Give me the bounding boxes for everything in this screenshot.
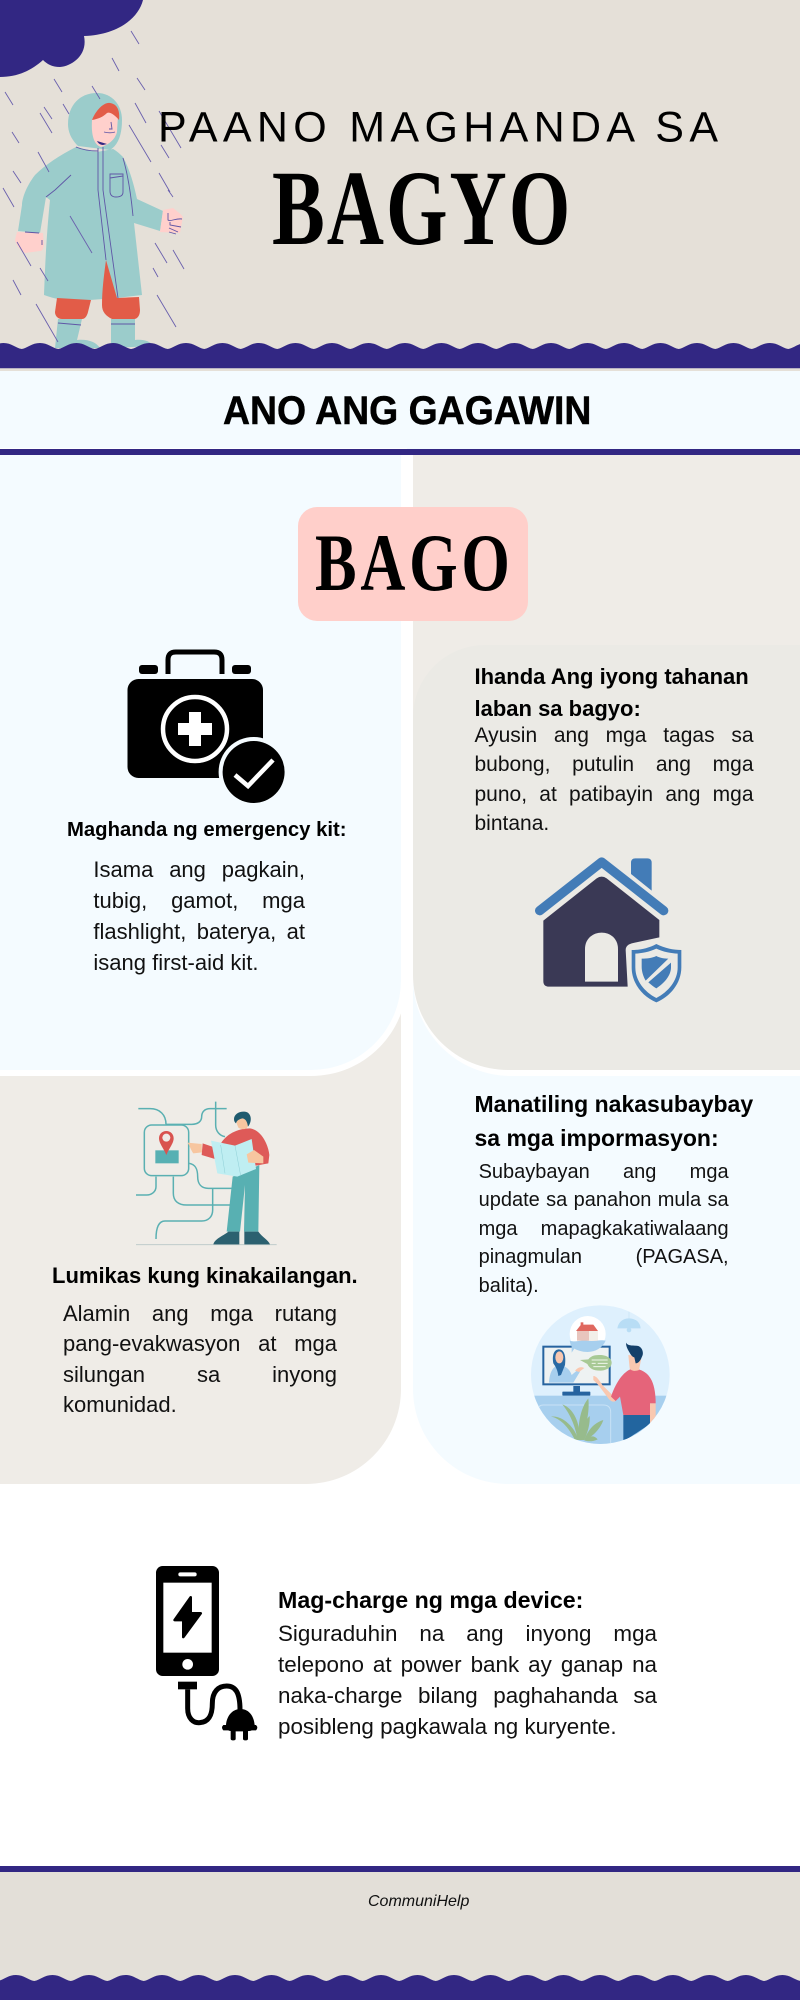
- text: prepare home: bubong, putulin ang mga: [474, 753, 754, 776]
- heading: stay informed: Manatiling nakasubaybay: [474, 1091, 753, 1117]
- footer credit: CommuniHelp: [368, 1893, 469, 1910]
- text: emergency kit: Isama ang pagkain,: [93, 857, 305, 882]
- text: evacuate: pang-evakwasyon at mga: [63, 1331, 337, 1356]
- heading: stay informed: sa mga impormasyon:: [474, 1125, 719, 1151]
- panel: emergency kit: [0, 454, 401, 1070]
- icon: person watching news on monitor: [531, 1306, 670, 1444]
- text: evacuate: silungan sa inyong: [63, 1362, 337, 1387]
- panel: roof background: [413, 454, 800, 854]
- heading: prepare home: [474, 664, 749, 721]
- text: charge devices: [278, 1621, 657, 1739]
- text: emergency kit: [93, 857, 305, 975]
- panel: prepare home: [413, 645, 800, 1070]
- heading: evacuate: Lumikas kung kinakailangan.: [52, 1263, 358, 1288]
- title line one: PAANO MAGHANDA SA: [158, 104, 718, 152]
- title line two: BAGYO: [272, 150, 572, 268]
- text: evacuate: Alamin ang mga rutang: [63, 1301, 337, 1326]
- rain streaks: [3, 31, 184, 342]
- icon: map and person: [136, 1102, 277, 1246]
- text: emergency kit: tubig, gamot, mga: [93, 888, 305, 913]
- footer wave: [0, 1975, 800, 2000]
- icon: house with shield: [535, 857, 682, 1002]
- text: stay informed: Subaybayan ang mga: [479, 1161, 729, 1183]
- water wave: [0, 343, 800, 368]
- heading: emergency kit: Maghanda ng emergency kit:: [67, 819, 346, 841]
- badge: BAGO: [298, 507, 528, 620]
- text: emergency kit: isang first-aid kit.: [93, 950, 258, 975]
- text: prepare home: bintana.: [474, 812, 549, 835]
- heading: stay informed: [474, 1091, 753, 1151]
- text: evacuate: komunidad.: [63, 1392, 177, 1417]
- text: charge devices: telepono at power bank ay ganap na: [278, 1652, 657, 1677]
- icon: first-aid kit with check: [128, 650, 285, 803]
- badge text: BAGO: [315, 517, 514, 608]
- text: prepare home: [474, 724, 754, 835]
- panel: stay informed: [413, 986, 800, 1484]
- storm cloud: [0, 0, 143, 77]
- text: stay informed: balita).: [479, 1275, 539, 1297]
- text: stay informed: [479, 1161, 729, 1297]
- text: prepare home: Ayusin ang mga tagas sa: [474, 724, 754, 747]
- icon: phone with charger: [156, 1566, 258, 1740]
- rule under section heading: [0, 448, 800, 454]
- panel: evacuate: [0, 454, 401, 1484]
- text: evacuate: [63, 1301, 337, 1417]
- panel: charge devices: [156, 1566, 657, 1740]
- header panel: [0, 0, 800, 371]
- text: charge devices: naka-charge bilang paghahanda sa: [278, 1683, 657, 1708]
- footer rule: [0, 1866, 800, 1872]
- text: charge devices: Siguraduhin na ang inyong mga: [278, 1621, 657, 1646]
- person in raincoat: [15, 93, 183, 348]
- text: stay informed: pinagmulan (PAGASA,: [479, 1246, 729, 1268]
- section heading band: [0, 371, 800, 449]
- heading: prepare home: Ihanda Ang iyong tahanan: [474, 664, 749, 689]
- text: emergency kit: flashlight, baterya, at: [93, 919, 305, 944]
- heading: prepare home: laban sa bagyo:: [474, 696, 641, 721]
- section heading: ANO ANG GAGAWIN: [223, 389, 591, 433]
- heading: charge devices: Mag-charge ng mga device:: [278, 1587, 583, 1613]
- text: prepare home: puno, at patibayin ang mga: [474, 783, 754, 806]
- footer: [0, 1866, 800, 2000]
- text: stay informed: update sa panahon mula sa: [479, 1189, 729, 1211]
- text: charge devices: posibleng pagkawala ng kuryente.: [278, 1714, 617, 1739]
- text: stay informed: mga mapagkakatiwalaang: [479, 1218, 729, 1240]
